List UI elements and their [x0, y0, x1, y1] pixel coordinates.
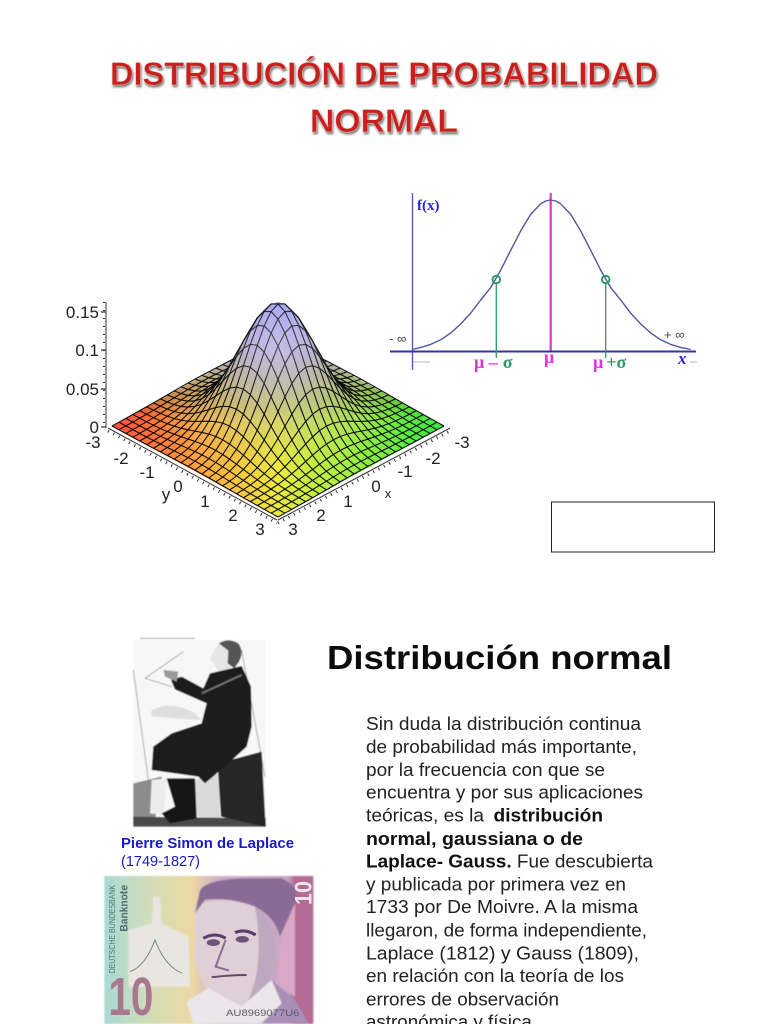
y axis labels: -1	[139, 463, 155, 482]
x axis edge	[278, 428, 450, 523]
y axis labels: -3	[85, 433, 101, 452]
body text: de probabilidad más importante,	[366, 737, 637, 757]
horizontal axis	[390, 350, 696, 352]
chart: normal curve	[389, 193, 697, 372]
y axis labels	[85, 433, 265, 539]
y axis edge	[108, 428, 277, 523]
body text: llegaron, de forma independiente,	[366, 920, 647, 940]
body text: por la frecuencia con que se	[366, 760, 605, 780]
mu minus sigma label: μ – σ	[474, 352, 513, 372]
body text	[366, 714, 654, 1024]
body text: teóricas, es la distribución	[366, 806, 603, 826]
empty box	[552, 502, 714, 552]
x axis labels: 0	[371, 477, 381, 496]
body text: Laplace- Gauss. Fue descubierta	[366, 852, 654, 872]
vertical z axis	[101, 302, 106, 428]
title	[110, 56, 658, 139]
title: DISTRIBUCIÓN DE PROBABILIDAD	[110, 56, 658, 92]
x axis labels: x	[385, 486, 392, 501]
x axis labels: -1	[397, 462, 413, 481]
banknote numeral corner: 10	[291, 881, 318, 905]
sigma markers	[492, 276, 610, 358]
x axis labels: -2	[425, 449, 441, 468]
vertical axis	[412, 193, 414, 370]
banknote: Gauss 10 DM	[104, 876, 318, 1024]
mean line	[550, 193, 552, 352]
banknote word: Banknote	[118, 885, 130, 932]
body text: 1733 por De Moivre. A la misma	[366, 897, 639, 917]
mu plus sigma label: μ+σ	[593, 352, 626, 372]
z axis labels: 0.15	[66, 303, 99, 322]
y axis labels: 1	[200, 492, 210, 511]
body text: normal, gaussiana o de	[366, 829, 583, 849]
body text: errores de observación	[366, 990, 559, 1010]
banknote artwork	[104, 876, 313, 1024]
y axis labels: 3	[255, 520, 265, 539]
body text: en relación con la teoría de los	[366, 966, 624, 986]
y axis labels: 0	[173, 477, 183, 496]
x label: x	[677, 349, 687, 368]
y axis labels: -2	[113, 449, 129, 468]
body text: y publicada por primera vez en	[366, 874, 626, 894]
heading: Distribución normal: Distribución normal	[327, 640, 672, 677]
y axis labels: y	[162, 485, 171, 504]
surface mesh	[112, 302, 444, 518]
x axis labels	[288, 433, 470, 539]
caption: Laplace name: Pierre Simon de Laplace	[121, 836, 294, 852]
x axis labels: -3	[454, 433, 470, 452]
z axis labels: 0.1	[75, 341, 99, 360]
z axis labels	[66, 303, 99, 437]
chart: 3D bivariate normal surface	[66, 302, 469, 535]
x axis labels: 1	[343, 492, 353, 511]
banknote issuer: DEUTSCHE BUNDESBANK	[108, 884, 117, 973]
z axis labels: 0	[90, 418, 99, 437]
mu label: μ	[544, 347, 554, 367]
f(x) label: f(x)	[417, 198, 440, 214]
body text: Sin duda la distribución continua	[366, 714, 642, 734]
body text: Laplace (1812) y Gauss (1809),	[366, 944, 639, 964]
x axis labels: 3	[288, 520, 298, 539]
minus infinity: - ∞	[389, 331, 406, 346]
x axis labels: 2	[316, 506, 326, 525]
banknote serial: AU8969077U6	[226, 1008, 299, 1018]
body text: encuentra y por sus aplicaciones	[366, 782, 643, 802]
y axis labels: 2	[228, 506, 238, 525]
bell curve	[412, 200, 691, 350]
plus infinity: + ∞	[664, 327, 684, 342]
portrait: Laplace engraving	[133, 638, 266, 827]
z axis labels: 0.05	[66, 380, 99, 399]
title: NORMAL	[310, 103, 458, 139]
caption: Laplace dates: (1749-1827)	[121, 854, 200, 870]
